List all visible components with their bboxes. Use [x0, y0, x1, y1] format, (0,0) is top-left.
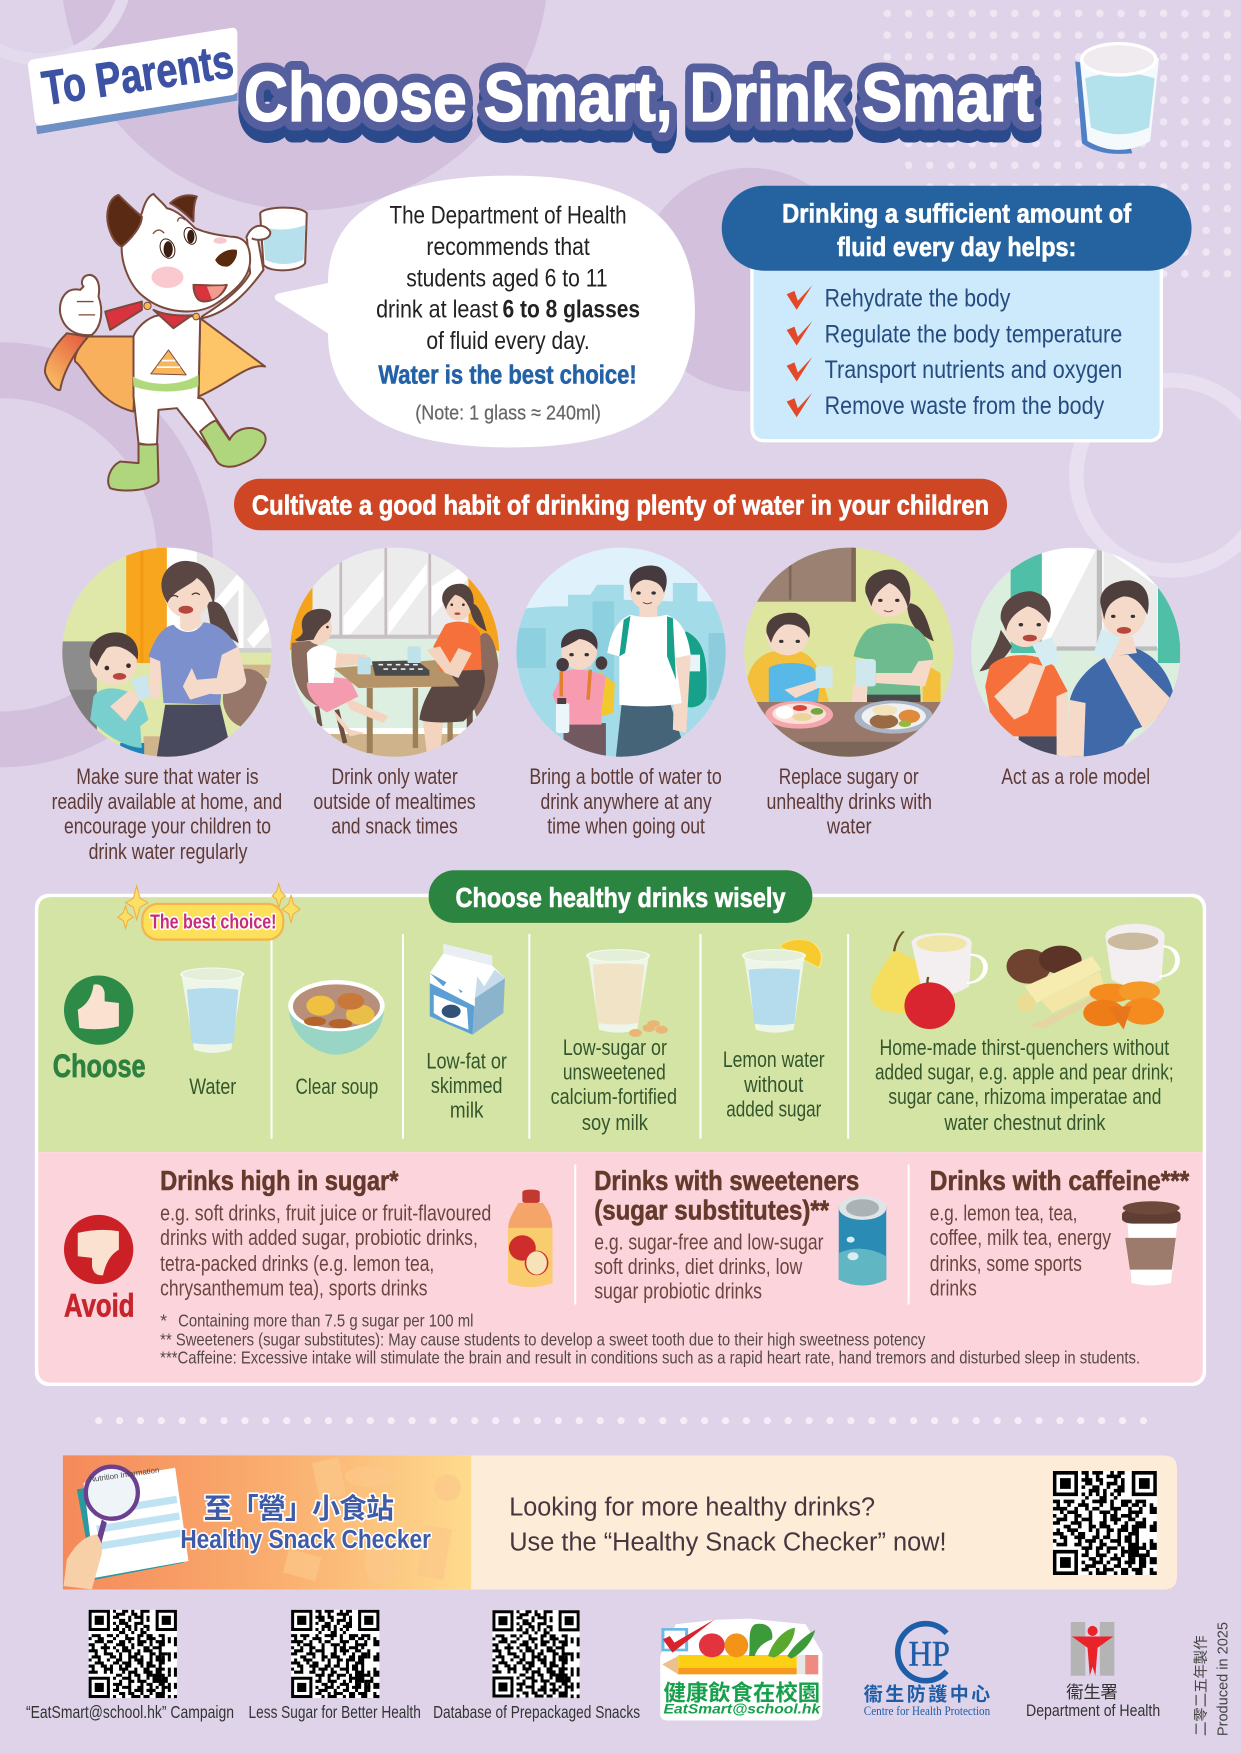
caption: milk: milk	[450, 1098, 484, 1123]
logo: Centre for Health Protection: HP	[909, 1634, 950, 1674]
caption: replace sugary drinks: unhealthy drinks with	[766, 789, 932, 814]
caption: drink only water	[313, 764, 476, 838]
panel: benefits: Regulate the body temperature	[825, 320, 1122, 348]
panel: choose and avoid	[35, 894, 1206, 1386]
mascot dog	[45, 194, 307, 491]
production note: 二零二五年製作	[1193, 1635, 1210, 1736]
heading: cultivate habit: Cultivate a good habit of drinking plenty of water in your children	[252, 490, 989, 521]
caption: role model: Act as a role model	[1001, 764, 1150, 789]
QR: Prepackaged snacks database	[433, 1610, 640, 1722]
QR: Less sugar	[249, 1610, 421, 1722]
icon: home-made ingredients	[871, 924, 1177, 1030]
banner: healthy snack checker: Use the “Healthy Snack Checker” now!	[509, 1528, 947, 1556]
caption: soy milk	[551, 1035, 677, 1135]
caption: drink only water: Drink only water	[331, 764, 458, 789]
text: drinks high in sugar	[160, 1165, 491, 1300]
background	[0, 0, 1241, 768]
logo: EatSmart@school.hk	[660, 1619, 822, 1720]
panel: benefits: Rehydrate the body	[825, 285, 1011, 313]
illustration: mother and son at home	[62, 548, 272, 757]
label: To Parents	[28, 28, 237, 134]
speech bubble: The Department of Health	[390, 203, 627, 230]
text: drinks with caffeine	[930, 1165, 1189, 1300]
speech bubble: (Note: 1 glass ≈ 240ml)	[415, 401, 601, 424]
caption: soy milk: calcium-fortified	[551, 1084, 677, 1109]
logo: EatSmart@school.hk: EatSmart@school.hk	[664, 1701, 822, 1717]
icon: lemon water	[743, 940, 822, 1033]
badge: the best choice: The best choice!	[150, 911, 277, 933]
footnotes: Containing more than 7.5 g sugar per 100 ml	[178, 1311, 473, 1331]
caption: bring a bottle: drink anywhere at any	[541, 789, 712, 814]
speech bubble: 6 to 8 glasses	[502, 297, 640, 324]
caption: lemon water: without	[743, 1072, 803, 1097]
speech bubble: recommends that	[426, 234, 590, 261]
caption: home-made drinks: water chestnut drink	[944, 1110, 1106, 1135]
text: drinks with caffeine: coffee, milk tea, energy	[930, 1225, 1111, 1250]
caption: lemon water: Lemon water	[723, 1047, 825, 1072]
badge: the best choice	[118, 884, 300, 940]
caption: drink only water: and snack times	[331, 813, 458, 838]
caption: soy milk: unsweetened	[563, 1059, 666, 1084]
text: drinks with caffeine: drinks, some sports	[930, 1251, 1082, 1276]
text: drinks with caffeine: e.g. lemon tea, tea,	[930, 1200, 1077, 1225]
footnotes: *	[160, 1311, 167, 1331]
caption: replace sugary drinks: Replace sugary or	[779, 764, 919, 789]
icon: thumbs down avoid	[64, 1215, 133, 1284]
illustration: replace sugary drinks at table	[744, 548, 954, 757]
icon: clear soup	[288, 980, 385, 1055]
text: drinks with sweeteners: (sugar substitutes)**	[594, 1194, 829, 1225]
caption: soy milk: soy milk	[582, 1110, 648, 1135]
icon: water glass	[181, 968, 243, 1053]
logo: Department of Health	[1026, 1622, 1160, 1720]
caption: bring a bottle: time when going out	[547, 813, 705, 838]
icon: soy milk	[587, 950, 668, 1037]
icon: juice bottle	[508, 1190, 552, 1287]
caption: drink only water: outside of mealtimes	[313, 789, 476, 814]
speech bubble: students aged 6 to 11	[406, 265, 608, 292]
text: drinks high in sugar: Drinks high in sugar*	[160, 1165, 399, 1196]
panel: benefits: Drinking a sufficient amount of	[782, 199, 1131, 229]
panel: benefits: Remove waste from the body	[825, 392, 1105, 420]
title: Choose Smart, Drink Smart	[244, 58, 1034, 136]
footnotes	[160, 1311, 1140, 1368]
icon: coffee cup	[1122, 1201, 1181, 1285]
production note	[1193, 1622, 1231, 1736]
icon: milk carton	[430, 944, 505, 1035]
text: drinks with sweeteners	[594, 1165, 859, 1304]
caption: milk: skimmed	[431, 1073, 502, 1098]
illustration: chess at table	[290, 548, 500, 757]
logo: Centre for Health Protection: Centre for Health Protection	[864, 1704, 991, 1718]
footnotes: ** Sweeteners (sugar substitutes): May cause students to develop a sweet tooth due to their high sweetness potency	[160, 1330, 925, 1350]
banner: healthy snack checker: 至「營」小食站	[204, 1493, 394, 1524]
illustration: parents as role models	[971, 548, 1180, 757]
logo: Centre for Health Protection: 衞生防護中心	[864, 1682, 990, 1705]
logo: Department of Health: Department of Health	[1026, 1702, 1160, 1720]
production note: Produced in 2025	[1215, 1622, 1231, 1736]
speech bubble	[275, 176, 695, 447]
caption: home-made drinks	[875, 1035, 1174, 1135]
icon: soda can	[839, 1196, 886, 1285]
caption: water available at home	[52, 764, 282, 864]
caption: water available at home: encourage your children to	[64, 813, 271, 838]
text: drinks with caffeine: Drinks with caffeine***	[930, 1165, 1189, 1196]
caption: clear soup: Clear soup	[296, 1074, 378, 1099]
banner: healthy snack checker: Looking for more healthy drinks?	[509, 1494, 875, 1522]
banner: healthy snack checker: Nutrition Information	[89, 1465, 160, 1484]
QR: EatSmart campaign	[26, 1610, 234, 1722]
caption: water available at home: Make sure that water is	[76, 764, 259, 789]
text: drinks high in sugar: drinks with added sugar, probiotic drinks,	[160, 1225, 478, 1250]
logo: Department of Health: 衞生署	[1066, 1682, 1118, 1702]
speech bubble: drink at least	[376, 297, 498, 324]
QR: Prepackaged snacks database: Database of Prepackaged Snacks	[433, 1702, 640, 1722]
panel: benefits: fluid every day helps:	[837, 232, 1076, 262]
caption: soy milk: Low-sugar or	[563, 1035, 667, 1060]
heading: cultivate habit	[234, 479, 1007, 530]
text: drinks high in sugar: e.g. soft drinks, fruit juice or fruit-flavoured	[160, 1200, 491, 1225]
panel: benefits	[722, 186, 1192, 441]
caption: home-made drinks: sugar cane, rhizoma imperatae and	[888, 1084, 1161, 1109]
caption: replace sugary drinks	[766, 764, 932, 838]
text: drinks with sweeteners: e.g. sugar-free and low-sugar	[594, 1230, 824, 1255]
caption: lemon water	[723, 1047, 825, 1121]
banner: healthy snack checker	[63, 1455, 1177, 1590]
caption: replace sugary drinks: water	[826, 813, 872, 838]
text: drinks high in sugar: chrysanthemum tea), sports drinks	[160, 1275, 428, 1300]
caption: water: Water	[189, 1074, 236, 1099]
speech bubble: of fluid every day.	[426, 328, 590, 355]
text: drinks with sweeteners: sugar probiotic drinks	[594, 1279, 762, 1304]
text: drinks with caffeine: drinks	[930, 1275, 977, 1300]
panel: benefits: Transport nutrients and oxygen	[825, 356, 1122, 384]
illustration: father and daughter with bottle	[516, 548, 726, 757]
label: avoid: Avoid	[64, 1288, 134, 1324]
text: drinks with sweeteners: Drinks with sweeteners	[594, 1165, 859, 1196]
caption: milk: Low-fat or	[426, 1048, 507, 1073]
caption: bring a bottle: Bring a bottle of water to	[529, 764, 722, 789]
label: choose: Choose	[53, 1048, 146, 1084]
label: To Parents: To Parents	[39, 34, 237, 116]
caption: lemon water: added sugar	[726, 1096, 821, 1121]
caption: milk	[426, 1048, 507, 1123]
logo: EatSmart@school.hk: 健康飲食在校園	[664, 1679, 820, 1705]
title: Choose Smart, Drink Smart	[244, 58, 1034, 136]
caption: water available at home: drink water regularly	[89, 839, 248, 864]
heading: choose healthy drinks	[429, 870, 812, 923]
caption: bring a bottle	[529, 764, 722, 838]
icon: glass of water	[1075, 44, 1159, 154]
caption: water available at home: readily available at home, and	[52, 789, 282, 814]
logo: Centre for Health Protection	[864, 1624, 991, 1718]
title: Choose Smart, Drink Smart	[244, 70, 1034, 148]
caption: home-made drinks: Home-made thirst-quenchers without	[879, 1035, 1169, 1060]
QR: EatSmart campaign: “EatSmart@school.hk” Campaign	[26, 1702, 234, 1722]
text: drinks with sweeteners: soft drinks, diet drinks, low	[594, 1254, 802, 1279]
QR: Less sugar: Less Sugar for Better Health	[249, 1702, 421, 1722]
text: drinks high in sugar: tetra-packed drinks (e.g. lemon tea,	[160, 1251, 434, 1276]
heading: choose healthy drinks: Choose healthy drinks wisely	[456, 882, 786, 913]
banner: healthy snack checker: Healthy Snack Checker	[180, 1526, 431, 1554]
speech bubble: Water is the best choice!	[378, 362, 637, 390]
icon: thumbs up choose	[64, 975, 133, 1045]
